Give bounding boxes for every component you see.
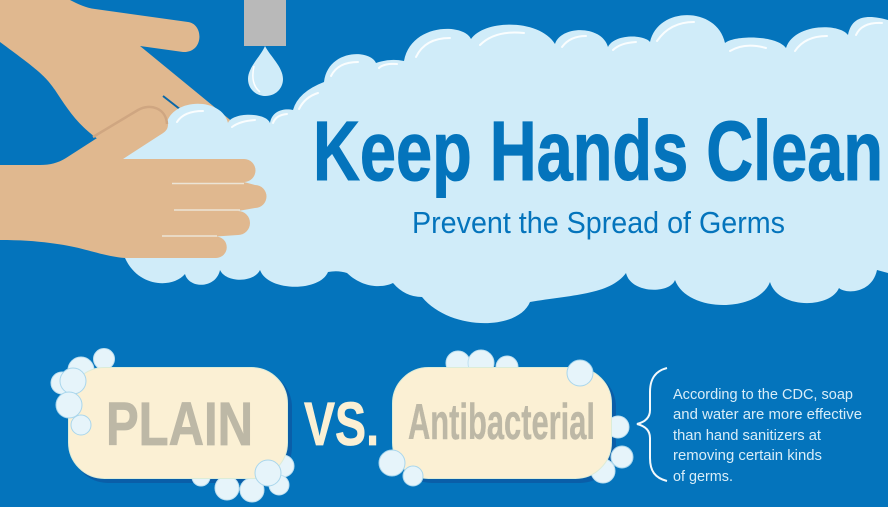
bubbles above plain soap bbox=[51, 348, 114, 394]
icon: water drop bbox=[248, 46, 283, 96]
label: PLAIN: PLAIN bbox=[106, 390, 253, 458]
bubbles behind antibacterial soap bbox=[591, 416, 629, 483]
label: VS.: VS. bbox=[304, 390, 379, 458]
panel: plain soap bbox=[51, 348, 294, 502]
text block: CDC note bbox=[673, 387, 862, 485]
bubbles above antibacterial soap bbox=[446, 350, 518, 378]
soap shadow bbox=[396, 371, 616, 483]
soap bar bbox=[392, 368, 612, 478]
subtitle: Prevent the Spread of Germs bbox=[412, 205, 785, 240]
label: Antibacterial: Antibacterial bbox=[408, 394, 595, 450]
icon: upper hand bbox=[0, 0, 240, 190]
bubbles in front of antibacterial soap bbox=[379, 360, 633, 486]
text block: CDC note: According to the CDC, soap bbox=[673, 387, 853, 403]
text block: CDC note: than hand sanitizers at bbox=[673, 428, 821, 444]
foam highlights bbox=[177, 22, 882, 127]
icon: lower hand bbox=[0, 107, 266, 258]
panel: soap foam cloud bbox=[123, 15, 888, 323]
text block: CDC note: and water are more effective bbox=[673, 407, 862, 423]
bubbles behind plain soap bbox=[192, 455, 294, 502]
icon: faucet bbox=[244, 0, 286, 46]
text block: CDC note: of germs. bbox=[673, 469, 733, 485]
curly bracket bbox=[637, 368, 667, 481]
bubbles in front of plain soap bbox=[56, 368, 281, 486]
soap bar bbox=[68, 368, 288, 478]
panel: antibacterial soap bbox=[379, 350, 633, 486]
soap shadow bbox=[72, 371, 292, 483]
text block: CDC note: removing certain kinds bbox=[673, 448, 822, 464]
